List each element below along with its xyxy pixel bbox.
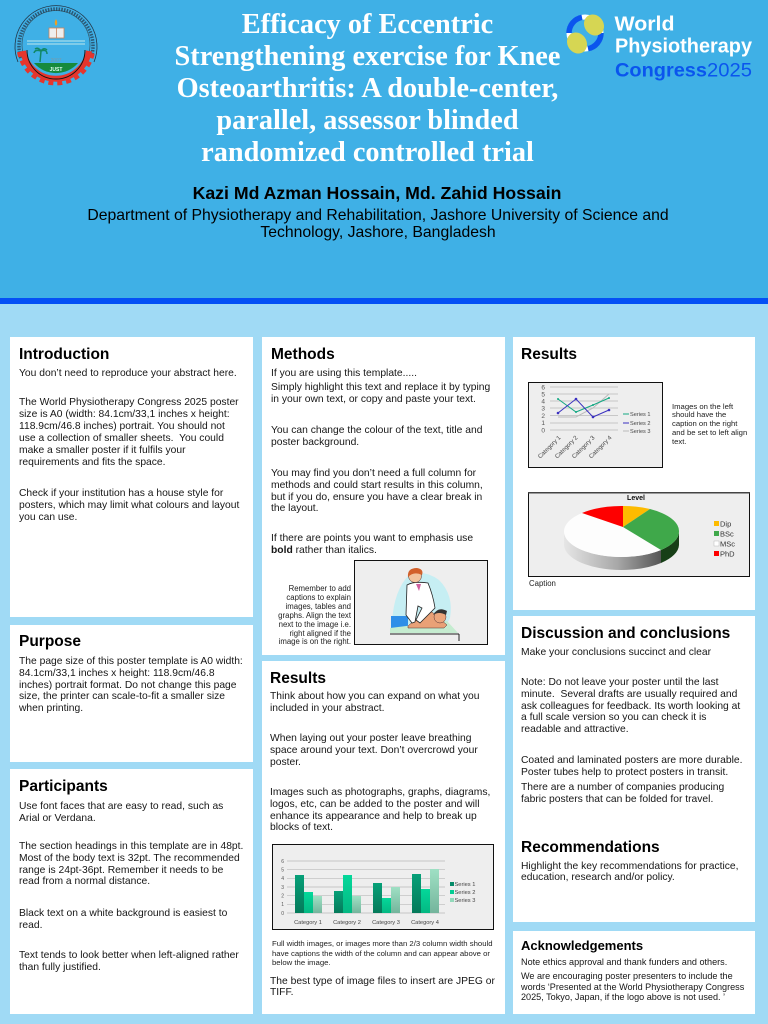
text: acknowledgements: 2025, Tokyo, Japan, if the logo above is not used. ’ [521, 992, 725, 1002]
heading: discussion and conclusions: Discussion and conclusions [521, 625, 730, 642]
header blue rule [0, 298, 768, 304]
text: results (middle) [270, 691, 490, 833]
logo: World Physiotherapy Congress 2025: Congress [615, 60, 707, 82]
heading: results (middle): Results [270, 670, 326, 687]
text: participants: Use font faces that are easy to read, such as [19, 801, 223, 812]
pie chart: Level [627, 495, 645, 502]
text: results (middle): poster. Images such as photographs, graphs, diagrams, [270, 757, 490, 798]
text: recommendations [521, 860, 738, 883]
pie chart: MSc [720, 540, 735, 548]
title: Strengthening exercise for Knee [175, 40, 560, 72]
text: introduction: 118.9cm/46.8 inches) portrait. You should not [19, 421, 225, 432]
text: methods: in your own text, or copy and paste your text. You can change the colour of the text, title and [271, 394, 482, 436]
bar chart: 4 [281, 876, 284, 882]
line chart: 1 [541, 420, 545, 427]
text: results (middle): logos, etc, can be added to the poster and will [270, 799, 480, 810]
text: participants: than fully justified. [19, 962, 101, 973]
panel: results (right) [513, 337, 755, 610]
bar chart: Category 2 [333, 920, 361, 926]
heading: methods: Methods [271, 346, 335, 363]
line chart: Series 1 [630, 412, 651, 418]
text: discussion: minute. Several drafts are usually required and [521, 689, 737, 700]
caption: line chart: should have the [672, 410, 726, 419]
logo: World Physiotherapy Congress 2025: 2025 [707, 60, 752, 82]
text: introduction: posters, which may limit what colours and layout [19, 500, 239, 511]
text: discussion: ask colleagues for feedback. Its worth looking at [521, 701, 740, 712]
text: methods: methods and could start results in this column, [271, 480, 483, 491]
caption: massage image: images, tables and [286, 602, 351, 611]
logo: university seal [14, 5, 98, 86]
line chart: Category 3 [571, 435, 597, 460]
text: introduction: size is A0 (width: 84.1cm/33,1 inches x height: [19, 409, 230, 420]
caption: massage image [278, 584, 351, 646]
bar chart: Category 3 [372, 920, 400, 926]
text: acknowledgements [521, 957, 744, 1002]
panel: introduction [10, 337, 253, 617]
text: methods: the layout. If there are points you want to emphasis use [271, 503, 473, 544]
title: parallel, assessor blinded [216, 104, 519, 136]
logo: World Physiotherapy Congress 2025: World [614, 14, 674, 36]
bar chart: Series 2 [454, 890, 475, 896]
text: purpose: size, the printer can scale-to-fit a smaller size [19, 691, 225, 702]
title: Osteoarthritis: A double-center, [177, 72, 558, 104]
caption: line chart [672, 402, 747, 446]
logo: World Physiotherapy Congress 2025 [566, 14, 753, 82]
text: methods [271, 368, 490, 556]
heading: recommendations: Recommendations [521, 839, 660, 856]
text: purpose: when printing. [19, 703, 83, 714]
bar chart: 1 [281, 902, 284, 908]
line chart: Series 3 [630, 429, 651, 435]
caption: massage image: right aligned if the [289, 629, 351, 638]
caption: massage image: graphs. Align the text [278, 611, 351, 620]
pie chart: BSc [720, 530, 734, 538]
panel: participants [10, 769, 253, 1014]
bar chart [272, 844, 494, 930]
text: acknowledgements: Note ethics approval and thank funders and others. We are encouraging poster presenters to include the [521, 957, 733, 981]
line chart: 3 [541, 406, 545, 412]
text: participants: Arial or Verdana. The section headings in this template are in 48pt. [19, 813, 243, 852]
line chart: 5 [541, 392, 545, 398]
caption: bar chart: have captions the width of the column and can appear above or [272, 949, 490, 958]
text: purpose: inches) portrait format. Do not change this page [19, 680, 236, 691]
text: methods: but if you do, ensure you have a clear break in [271, 492, 482, 503]
text: results (middle): blocks of text. [270, 822, 333, 833]
heading: introduction: Introduction [19, 346, 109, 363]
text: results (middle): enhance its appearance and help to break up [270, 811, 477, 822]
heading: purpose: Purpose [19, 633, 81, 650]
text: introduction: requirements and fits the space. [19, 457, 166, 468]
panel: acknowledgements [513, 931, 755, 1014]
title: randomized controlled trial [201, 136, 534, 168]
text: introduction: use a collection of smaller sheets. You could [19, 433, 224, 444]
text: purpose: The page size of this poster template is A0 width: [19, 656, 243, 667]
heading: results (right): Results [521, 346, 577, 363]
caption: pie chart: Caption [529, 579, 556, 588]
caption: massage image: captions to explain [286, 593, 351, 602]
bar chart: 6 [281, 859, 284, 865]
line chart: 4 [541, 398, 545, 406]
authors: Kazi Md Azman Hossain, Md. Zahid Hossain [193, 183, 561, 203]
text: participants [19, 801, 243, 973]
text: participants: read. Text tends to look better when left-aligned rather [19, 920, 239, 961]
text: image file types: TIFF. [270, 987, 293, 998]
text: participants: Most of the body text is 32pt. The recommended [19, 853, 240, 864]
line chart: Category 2 [554, 435, 580, 460]
text: purpose: 84.1cm/33,1 inches x height: 118.9cm/46.8 [19, 668, 215, 679]
text: discussion: fabric posters that can be folded for travel. [521, 794, 713, 805]
panel: methods [262, 337, 505, 655]
image: therapist massage illustration [354, 560, 488, 645]
pie chart [528, 492, 750, 577]
caption: bar chart [272, 939, 493, 967]
panel: purpose [10, 625, 253, 762]
caption: line chart: caption on the right [672, 419, 737, 428]
caption: massage image: next to the image i.e. [279, 620, 351, 629]
text: introduction: make a smaller poster if it fulfils your [19, 445, 186, 456]
caption: line chart: Images on the left [672, 402, 733, 410]
bar chart: 5 [281, 868, 284, 874]
title: Efficacy of Eccentric [242, 8, 493, 40]
panel: discussion and conclusions [513, 616, 755, 922]
header banner [0, 0, 768, 298]
text: image file types: The best type of image files to insert are JPEG or [270, 976, 495, 986]
text: discussion: readable and attractive. Coated and laminated posters are more durable. [521, 724, 743, 766]
text: recommendations: Highlight the key recommendations for practice, [521, 860, 738, 872]
bar chart: 3 [281, 885, 284, 891]
bar chart: Series 1 [454, 882, 475, 888]
text: discussion [521, 647, 743, 805]
line chart: Category 4 [588, 435, 614, 460]
affiliation: Department of Physiotherapy and Rehabilitation, Jashore University of Science and [87, 207, 669, 224]
text: participants: read from a normal distance. Black text on a white background is easiest to [19, 876, 227, 919]
text: methods: bold rather than italics. [271, 545, 377, 556]
bar chart: Category 4 [411, 920, 439, 926]
text: methods: poster background. You may find you don’t need a full column for [271, 437, 476, 479]
bar chart: 0 [281, 911, 284, 917]
bar chart: Series 3 [454, 898, 475, 904]
bar chart: Category 1 [294, 920, 322, 926]
line chart: Series 2 [630, 421, 651, 427]
text: discussion: Make your conclusions succinct and clear Note: Do not leave your poster until the last [521, 647, 718, 688]
bar chart: 2 [281, 894, 284, 900]
text: results (middle): Think about how you can expand on what you [270, 691, 480, 702]
caption: bar chart: below the image. [272, 958, 331, 967]
pie chart: Dip [720, 520, 731, 528]
text: recommendations: education, research and/or policy. [521, 872, 675, 883]
line chart: 0 [541, 428, 545, 434]
text: results (middle): space around your text. Don’t overcrowd your [270, 745, 478, 756]
line chart [528, 382, 663, 468]
panel: results (middle) [262, 661, 505, 1014]
pie chart: PhD [720, 550, 735, 558]
logo: university seal: JUST [50, 67, 62, 73]
text: introduction: The World Physiotherapy Congress 2025 poster [19, 397, 239, 408]
line chart: 2 [541, 413, 545, 420]
logo: World Physiotherapy Congress 2025: Physiotherapy [615, 36, 753, 58]
text: participants: range is 24pt-36pt. Remember it needs to be [19, 865, 223, 876]
text: results (middle): included in your abstract. When laying out your poster leave breathing [270, 703, 471, 744]
caption: line chart: text. [672, 437, 687, 446]
text: discussion: Poster tubes help to protect posters in transit. There are a number of companies producing [521, 767, 728, 793]
text: image file types [270, 976, 495, 998]
caption: massage image: image is on the right. [279, 637, 351, 646]
text: discussion: a full scale version so you can check it is [521, 712, 706, 723]
text: introduction: you can use. [19, 512, 77, 523]
caption: bar chart: Full width images, or images more than 2/3 column width should [272, 939, 493, 948]
line chart: Category 1 [537, 435, 563, 460]
affiliation: Technology, Jashore, Bangladesh [260, 224, 496, 241]
text: purpose [19, 656, 243, 714]
line chart: 6 [541, 384, 545, 392]
logo: university seal: 2007 [50, 58, 62, 64]
text: methods: If you are using this template..... Simply highlight this text and replace it by typing [271, 368, 490, 393]
caption: line chart: and be set to left align [672, 428, 747, 437]
heading: participants: Participants [19, 778, 108, 795]
text: acknowledgements: words ‘Presented at the World Physiotherapy Congress [521, 982, 744, 992]
caption: massage image: Remember to add [289, 584, 351, 593]
text: introduction: You don’t need to reproduce your abstract here. Check if your institution has a house style for [19, 368, 237, 499]
heading: acknowledgements: Acknowledgements [521, 938, 643, 953]
affiliation [87, 207, 669, 241]
title [175, 8, 560, 168]
